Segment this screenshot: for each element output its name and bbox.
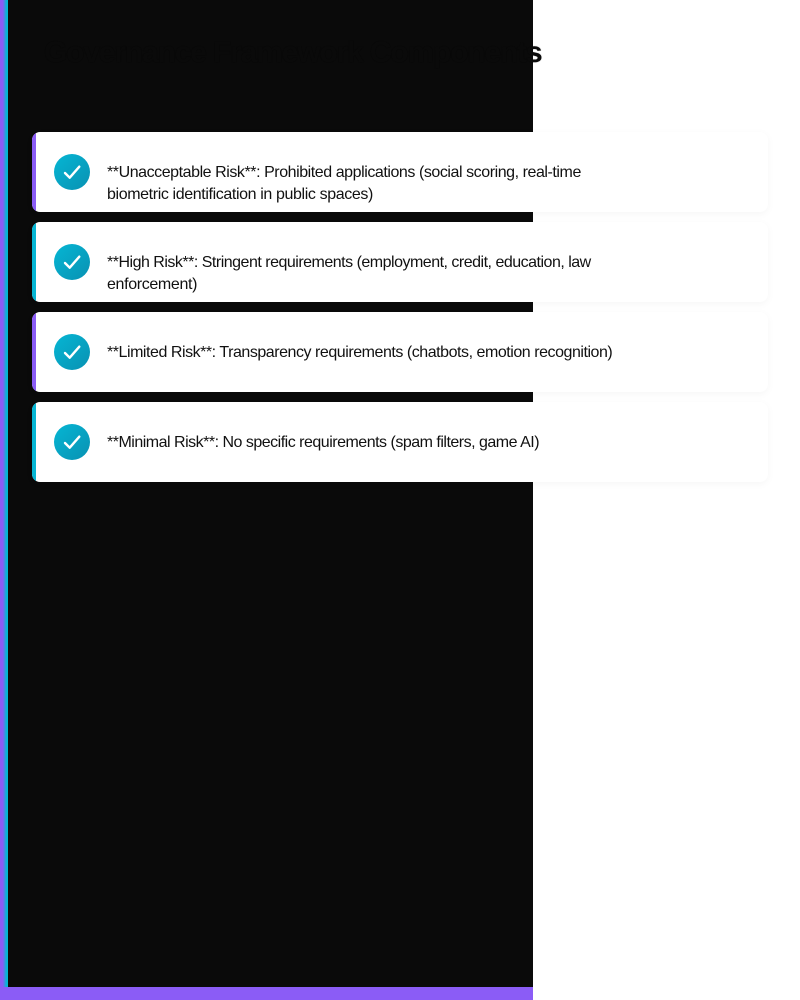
icon: check <box>54 244 90 280</box>
icon: check <box>54 154 90 190</box>
card accent: cyan <box>32 402 36 482</box>
card accent: purple <box>32 132 36 212</box>
bottom accent bar <box>0 987 533 1000</box>
title: Governance Framework Components <box>44 36 542 69</box>
text: **High Risk**: Stringent requirements (employment, credit, education, law <box>107 254 591 271</box>
text: **Limited Risk**: Transparency requirements (chatbots, emotion recognition) <box>107 344 612 361</box>
text: **Unacceptable Risk**: Prohibited applications (social scoring, real-time <box>107 164 581 181</box>
icon: check <box>54 334 90 370</box>
text <box>107 254 592 293</box>
dark background panel <box>0 0 533 1000</box>
text: **Minimal Risk**: No specific requirements (spam filters, game AI) <box>107 434 539 451</box>
card accent: purple <box>32 312 36 392</box>
card: limited risk <box>32 312 768 392</box>
text: enforcement) <box>107 276 197 293</box>
card accent: cyan <box>32 222 36 302</box>
card: minimal risk <box>32 402 768 482</box>
card: unacceptable risk <box>32 132 768 212</box>
left gradient accent bar <box>0 0 8 1000</box>
text <box>107 164 581 203</box>
card: high risk <box>32 222 768 302</box>
text: biometric identification in public spaces) <box>107 186 373 203</box>
icon: check <box>54 424 90 460</box>
